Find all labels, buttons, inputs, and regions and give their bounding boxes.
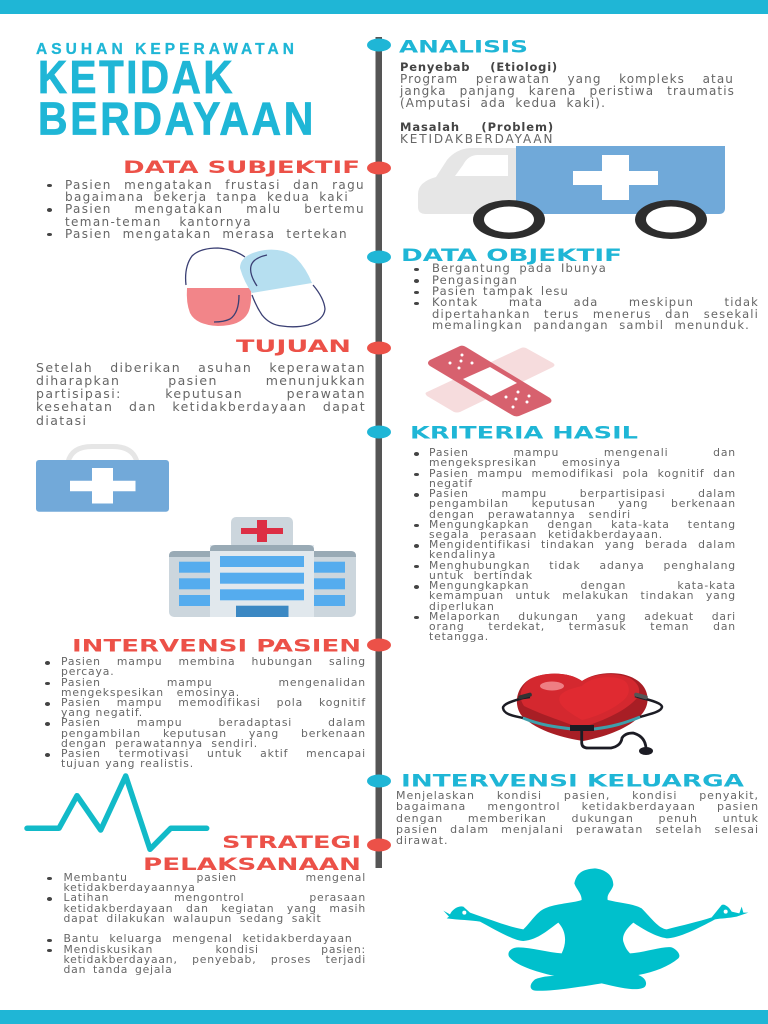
icon: meditating figure [444,868,748,991]
list: data objektif: dipertahankan terus menerus dan sesekali [432,307,759,321]
list: intervensi pasien: Pasien mampu beradaptasi dalam [61,716,366,729]
heading: intervensi pasien: INTERVENSI PASIEN [72,637,361,656]
list: kriteria hasil: diperlukan [429,600,495,613]
list: kriteria hasil: dengan perawatannya sendiri [429,508,631,520]
heading: kriteria hasil: KRITERIA HASIL [410,424,639,443]
icon: capsules [184,247,326,328]
panel: tujuan [36,337,366,428]
list: kriteria hasil: Mengungkapkan dengan kata-kata [429,579,736,592]
text: penyebab dan masalah: jangka panjang karena peristiwa traumatis [400,84,735,98]
icon: hospital [169,517,356,617]
list: kriteria hasil: Pasien mampu berpartisipasi dalam [429,487,736,500]
text: penyebab dan masalah [400,60,735,146]
list: data objektif: Pasien tampak lesu [432,284,569,298]
list: data objektif: Kontak mata ada meskipun tidak [432,295,759,309]
text: tujuan [36,360,366,428]
list: data objektif: Bergantung pada Ibunya [432,261,607,275]
text: intervensi keluarga: dengan memberikan dukungan penuh untuk [396,812,759,825]
text: intervensi keluarga: dirawat. [396,834,448,847]
list: kriteria hasil: negatif [429,477,473,490]
list: intervensi pasien: percaya. [61,665,114,678]
list: kriteria hasil: Mengungkapkan dengan kata-kata tentang [429,518,736,531]
heading: strategi pelaksanaan [143,833,361,874]
list: strategi pelaksanaan: dan tanda gejala [64,963,172,976]
title: BERDAYAAN [38,92,316,144]
heading: strategi pelaksanaan: PELAKSANAAN [143,855,361,874]
icon: bandage [426,346,554,416]
heading: analisis: ANALISIS [399,38,528,56]
list: kriteria hasil: Pasien mampu mengenali dan [429,446,736,459]
text: penyebab dan masalah: Masalah (Problem) [400,120,554,134]
panel: kriteria hasil [410,424,736,643]
list: intervensi pasien [45,655,366,770]
list: data objektif [414,261,759,332]
list: intervensi pasien: mengekspesikan emosinya. [61,686,240,699]
text: penyebab dan masalah: Program perawatan yang kompleks atau [400,72,734,86]
list: data subjektif: Pasien mengatakan merasa tertekan [65,227,348,241]
list: strategi pelaksanaan: ketidakberdayaan dan kegiatan yang masih [64,902,366,915]
list: intervensi pasien: Pasien mampu membina hubungan saling [61,655,366,668]
text: tujuan: diatasi [36,413,87,428]
list: strategi pelaksanaan: ketidakberdayaan, penyebab, proses terjadi [64,953,366,966]
list: kriteria hasil: Menghubungkan tidak adanya penghalang [429,559,736,572]
panel: strategi pelaksanaan [47,833,366,976]
text: intervensi keluarga: Menjelaskan kondisi pasien, kondisi penyakit, [396,789,759,802]
list: kriteria hasil: kendalinya [429,548,496,561]
text: tujuan: Setelah diberikan asuhan keperawatan [36,360,366,374]
text: intervensi keluarga: bagaimana mengontrol ketidakberdayaan pasien [396,800,759,813]
timeline [367,37,391,868]
text: penyebab dan masalah: KETIDAKBERDAYAAN [400,132,554,146]
list: data subjektif: teman-teman kantornya [65,214,252,228]
heading: tujuan: TUJUAN [236,337,351,356]
list: strategi pelaksanaan: dapat dilakukan walaupun sedang sakit [64,912,322,925]
heading: intervensi keluarga: INTERVENSI KELUARGA [401,772,744,791]
list: kriteria hasil: tetangga. [429,630,489,643]
bottom bar [0,1010,768,1024]
list: intervensi pasien: dengan perawatannya sendiri. [61,737,258,750]
title: ASUHAN KEPERAWATAN [36,41,294,58]
panel: data objektif [401,246,759,332]
icon: ambulance [418,146,725,239]
list: strategi pelaksanaan: Membantu pasien mengenal [64,871,366,884]
text: tujuan: kesehatan dan ketidakberdayaan dapat [36,399,366,414]
panel: analisis [399,38,735,146]
list: kriteria hasil: orang terdekat, termasuk teman dan [429,620,736,633]
text: penyebab dan masalah: Penyebab (Etiologi) [400,60,558,74]
list: data subjektif: bagaimana bekerja tanpa kedua kaki [65,190,349,204]
heading: strategi pelaksanaan: STRATEGI [222,833,361,852]
list: kriteria hasil: Mengidentifikasi tindakan yang berada dalam [429,538,736,551]
panel: intervensi pasien [45,637,366,770]
list: kriteria hasil: kemampuan untuk melakukan tindakan yang [429,589,736,602]
icon: heartbeat line [24,773,210,852]
title [36,41,316,144]
list: strategi pelaksanaan [47,871,366,976]
list: data objektif: memalingkan pandangan sambil menunduk. [432,318,750,332]
text: intervensi keluarga [396,789,759,847]
icon: medical bag [36,444,169,512]
list: intervensi pasien: Pasien termotivasi untuk aktif mencapai [61,747,366,760]
text: penyebab dan masalah: (Amputasi ada kedua kaki). [400,96,606,110]
list: intervensi pasien: yang negatif. [61,706,143,719]
text: intervensi keluarga: pasien dalam menjalani perawatan setelah selesai [396,823,759,836]
list: strategi pelaksanaan: Latihan mengontrol perasaan [64,891,366,904]
list: kriteria hasil [414,446,736,643]
list: data objektif: Pengasingan [432,273,518,287]
list: strategi pelaksanaan: Mendiskusikan kondisi pasien: [64,943,366,956]
list: kriteria hasil: mengekspresikan emosinya [429,456,621,469]
list: kriteria hasil: Pasien mampu memodifikasi pola kognitif dan [429,467,736,480]
list: kriteria hasil: Melaporkan dukungan yang adekuat dari [429,610,736,623]
list: intervensi pasien: Pasien mampu memodifikasi pola kognitif [61,696,366,709]
icon: heart with stethoscope [502,673,664,755]
text: tujuan: partisipasi: keputusan perawatan [36,386,366,401]
panel: data subjektif [47,158,365,241]
list: data subjektif: Pasien mengatakan malu bertemu [65,202,365,216]
panel: intervensi keluarga [396,772,759,847]
list: strategi pelaksanaan: ketidakberdayaannya [64,881,196,894]
top bar [0,0,768,14]
heading: data objektif: DATA OBJEKTIF [401,246,622,265]
list: kriteria hasil: untuk bertindak [429,569,533,582]
list: intervensi pasien: tujuan yang realistis. [61,757,194,770]
list: intervensi pasien: pengambilan keputusan yang berkenaan [61,727,366,740]
list: intervensi pasien: Pasien mampu mengenalidan [61,676,366,688]
heading: data subjektif: DATA SUBJEKTIF [123,158,360,177]
list: strategi pelaksanaan: Bantu keluarga mengenal ketidakberdayaan [64,932,352,945]
text: tujuan: diharapkan pasien menunjukkan [36,373,366,388]
title: KETIDAK [38,51,235,103]
list: data subjektif [47,178,365,241]
list: data subjektif: Pasien mengatakan frustasi dan ragu [65,178,365,192]
list: kriteria hasil: segala perasaan ketidakberdayaan. [429,528,663,541]
list: kriteria hasil: pengambilan keputusan yang berkenaan [429,497,736,510]
